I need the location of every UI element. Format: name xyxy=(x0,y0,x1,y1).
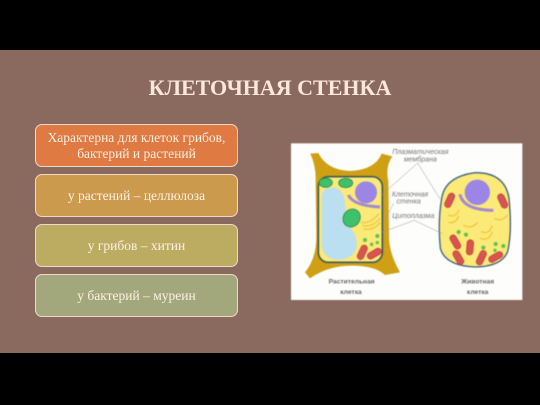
animal cell membrane and cytoplasm xyxy=(439,173,510,267)
diagram labels: мембрана xyxy=(404,155,437,163)
nucleus xyxy=(355,181,377,203)
golgi xyxy=(361,214,380,229)
endoplasmic reticulum xyxy=(348,195,380,207)
box: plants cellulose xyxy=(35,174,238,217)
diagram labels xyxy=(329,149,494,296)
vacuole xyxy=(322,188,357,260)
diagram labels: клетка xyxy=(340,289,362,296)
background slide panel xyxy=(0,50,540,353)
box: bacteria murein xyxy=(35,274,238,317)
label: cell wall: Клеточная xyxy=(392,192,428,199)
animal granules xyxy=(457,230,505,252)
plant cell wall xyxy=(305,153,400,278)
box: general statement: Характерна для клеток грибов, xyxy=(48,130,225,145)
label leader lines xyxy=(382,163,442,234)
box: general statement xyxy=(35,124,238,167)
animal cell xyxy=(439,173,510,267)
box: general statement: бактерий и растений xyxy=(77,146,196,160)
plant cytoplasm xyxy=(318,177,382,262)
label: animal cell: Животная xyxy=(460,278,494,285)
box: bacteria murein: у бактерий – муреин xyxy=(77,288,196,303)
mitochondria xyxy=(356,244,383,261)
plant cell xyxy=(305,153,400,278)
box: fungi chitin xyxy=(35,224,238,267)
label: cytoplasm: Цитоплазма xyxy=(392,213,434,220)
label: plant cell: Растительная xyxy=(329,278,375,285)
diagram: plant and animal cells xyxy=(290,142,523,301)
animal golgi xyxy=(448,210,508,239)
animal mitochondria xyxy=(443,192,509,266)
diagram labels: клетка xyxy=(467,289,489,296)
box: plants cellulose: у растений – целлюлоза xyxy=(68,188,205,203)
diagram labels: стенка xyxy=(397,199,421,206)
box: fungi chitin: у грибов – хитин xyxy=(88,238,185,253)
green granules xyxy=(363,234,379,246)
label: plasma membrane: Плазматическая xyxy=(392,149,449,156)
title: КЛЕТОЧНАЯ СТЕНКА xyxy=(149,75,391,100)
animal reticulum xyxy=(460,194,493,210)
chloroplasts xyxy=(319,178,364,230)
animal nucleus xyxy=(465,180,490,205)
